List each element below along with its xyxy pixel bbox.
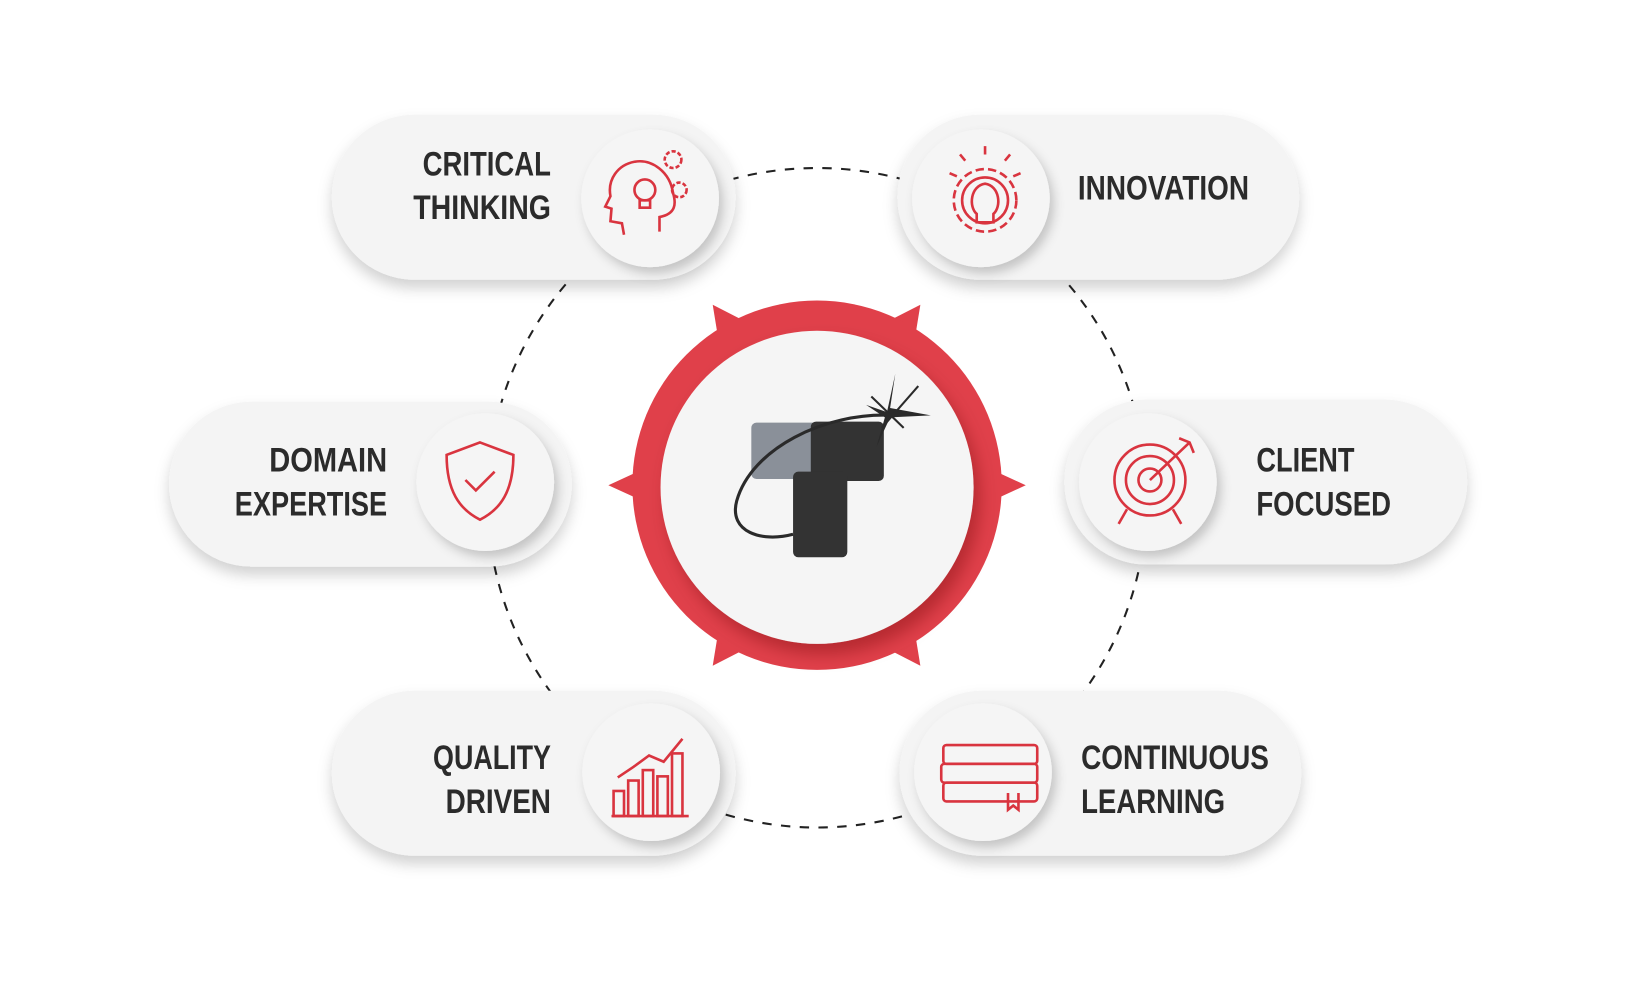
icon: gear bulb: [950, 146, 1021, 232]
panel: quality driven: QUALITY: [433, 739, 551, 777]
panel: domain expertise: DOMAIN: [269, 442, 387, 480]
panel: continuous learning: CONTINUOUS: [1081, 739, 1269, 777]
panel: critical thinking: THINKING: [413, 189, 551, 227]
panel: client focused: FOCUSED: [1256, 485, 1391, 523]
center emblem: [608, 301, 1026, 670]
icon: head with bulb and gears: [605, 151, 687, 235]
panel: innovation: [897, 115, 1299, 280]
icon: bar chart trend: [611, 739, 689, 816]
icon: target arrow: [1114, 438, 1194, 524]
panel: quality driven: DRIVEN: [446, 783, 551, 821]
panel: continuous learning: [899, 691, 1301, 856]
panel: domain expertise: [169, 402, 572, 567]
panel: continuous learning: LEARNING: [1081, 783, 1225, 821]
icon: books: [941, 745, 1037, 810]
icon: shield check: [447, 442, 513, 520]
panel: domain expertise: EXPERTISE: [235, 485, 387, 523]
panel: client focused: [1064, 400, 1467, 565]
panel: innovation: INNOVATION: [1078, 169, 1249, 207]
dashed orbit ring: [487, 168, 1147, 827]
panel: critical thinking: CRITICAL: [423, 145, 551, 183]
logo: [735, 374, 931, 557]
panel: client focused: CLIENT: [1256, 442, 1354, 480]
panel: critical thinking: [332, 115, 736, 280]
panel: quality driven: [332, 691, 736, 856]
